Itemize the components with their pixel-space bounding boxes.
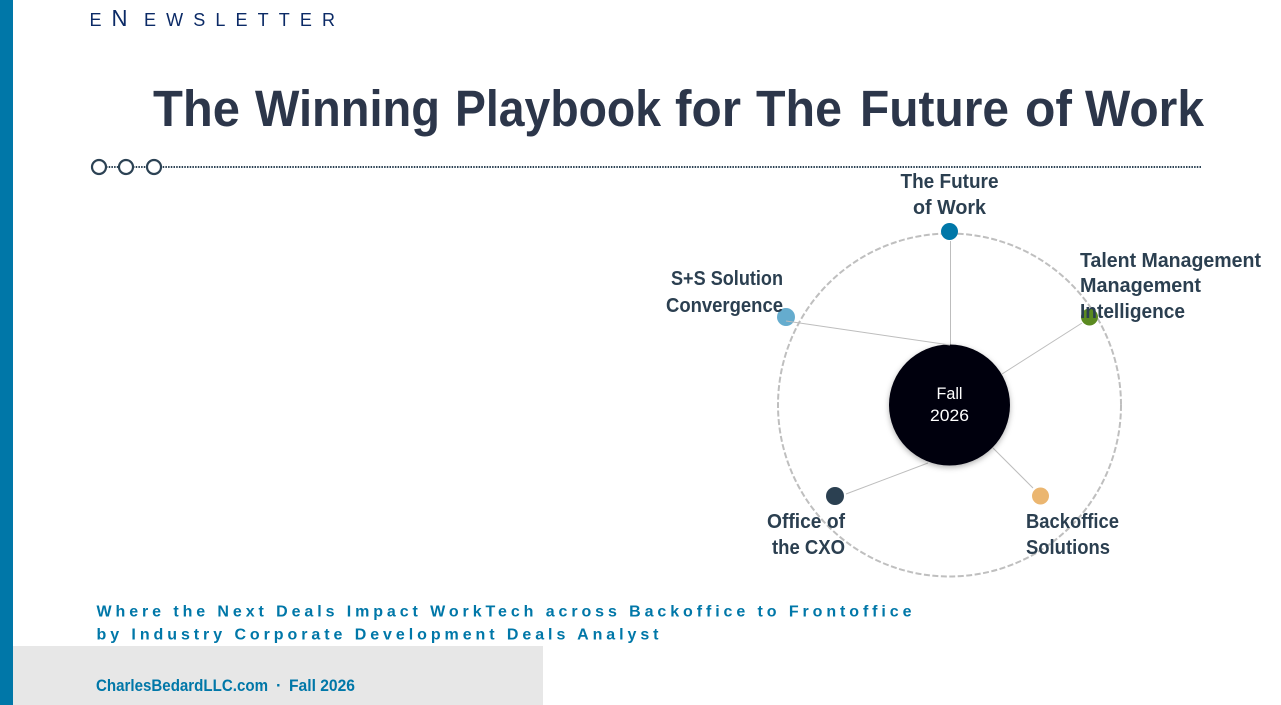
footer text: CharlesBedardLLC.com bbox=[96, 677, 268, 695]
node: The Future of Work: The Future bbox=[900, 171, 998, 193]
title: Work bbox=[1085, 80, 1205, 137]
title: Playbook bbox=[455, 80, 662, 137]
title: for bbox=[675, 80, 741, 137]
node: Office of the CXO: Office of bbox=[767, 511, 845, 533]
divider with three circles bbox=[92, 160, 1202, 174]
node: Talent Management Management Intelligence: Management bbox=[1080, 275, 1201, 297]
title: Winning bbox=[255, 80, 440, 137]
node: Talent Management Management Intelligence bbox=[1080, 250, 1261, 326]
node: Backoffice Solutions: Backoffice bbox=[1026, 511, 1119, 533]
eNewsletter label: N bbox=[112, 5, 128, 31]
title: The bbox=[153, 80, 240, 137]
subtitle: Where the Next Deals Impact WorkTech across Backoffice to Frontoffice bbox=[96, 604, 912, 620]
node: Office of the CXO bbox=[767, 487, 845, 559]
footer text: Fall 2026 bbox=[289, 677, 355, 695]
eNewsletter label bbox=[90, 5, 335, 31]
node: The Future of Work bbox=[900, 171, 998, 240]
eNewsletter label: E bbox=[90, 10, 102, 30]
node: Backoffice Solutions: Solutions bbox=[1026, 537, 1110, 559]
subtitle bbox=[96, 604, 912, 644]
node: Talent Management Management Intelligence: Intelligence bbox=[1080, 301, 1185, 323]
node: S+S Solution Convergence: S+S Solution bbox=[671, 268, 783, 290]
connector lines bbox=[846, 241, 1082, 494]
title: The bbox=[756, 80, 842, 137]
radial diagram bbox=[666, 171, 1261, 576]
footer band bbox=[13, 646, 543, 705]
title: of bbox=[1025, 80, 1073, 137]
subtitle: by Industry Corporate Development Deals Analyst bbox=[96, 626, 659, 644]
dashed orbit ring bbox=[778, 234, 1121, 576]
title: Future bbox=[860, 80, 1009, 137]
node: Talent Management Management Intelligence: Talent Management bbox=[1080, 250, 1261, 272]
centre hub: Fall 2026 bbox=[889, 344, 1010, 466]
footer text: · bbox=[276, 677, 282, 695]
node: Office of the CXO: the CXO bbox=[772, 537, 845, 559]
eNewsletter label: EWSLETTER bbox=[144, 10, 335, 30]
title bbox=[153, 80, 1205, 137]
centre hub: Fall 2026: Fall bbox=[936, 384, 962, 403]
left accent bar bbox=[0, 0, 13, 705]
node: S+S Solution Convergence: Convergence bbox=[666, 295, 783, 317]
node: The Future of Work: of Work bbox=[913, 197, 987, 219]
node: Backoffice Solutions bbox=[1026, 488, 1119, 559]
centre hub: Fall 2026: 2026 bbox=[930, 406, 969, 425]
node: S+S Solution Convergence bbox=[666, 268, 950, 345]
